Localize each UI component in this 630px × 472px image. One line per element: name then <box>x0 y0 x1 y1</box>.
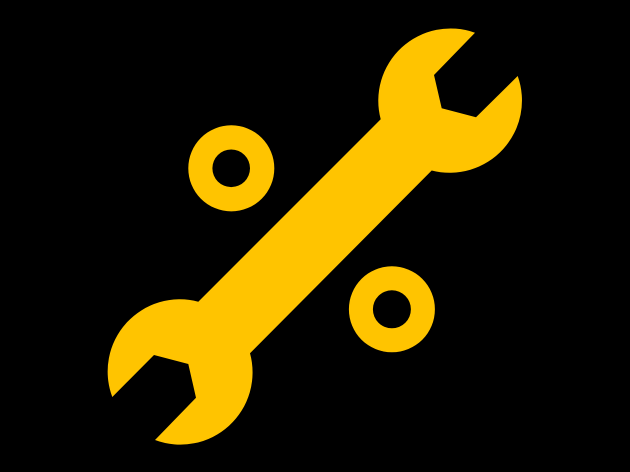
icon: wrench <box>108 28 522 445</box>
icon: lower percent ring <box>349 266 435 352</box>
icon: upper percent ring <box>188 125 274 211</box>
